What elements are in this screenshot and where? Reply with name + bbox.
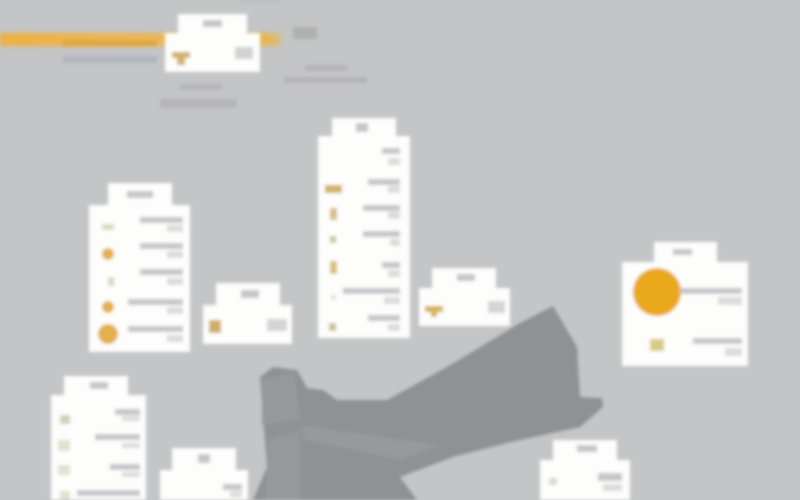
- panel: small card B: [419, 268, 510, 326]
- icon: marker B: [425, 306, 443, 317]
- row 5: [98, 324, 183, 344]
- row 3: [108, 269, 183, 286]
- top orange band: [0, 33, 281, 46]
- row 4: [102, 299, 183, 314]
- row 1: [382, 148, 400, 165]
- panel: pie card: [622, 242, 748, 366]
- panel: top card: [165, 14, 260, 72]
- row 6: [331, 288, 400, 304]
- icon: small marker: [650, 339, 664, 351]
- panel: small card A: [203, 283, 292, 344]
- top band labels: [63, 0, 367, 108]
- row 3: [58, 464, 140, 477]
- panel: left list: [89, 183, 190, 352]
- row 3: [330, 205, 400, 220]
- icon: marker A: [209, 320, 221, 333]
- panel: lower middle card: [160, 448, 248, 500]
- row 4: [60, 490, 140, 500]
- row 2: [58, 434, 140, 451]
- panel: lower right card: [540, 440, 630, 500]
- row 1: [60, 409, 140, 424]
- icon: top card marker: [172, 52, 190, 65]
- row 4: [330, 231, 400, 246]
- row 5: [330, 261, 400, 277]
- row 2: [325, 179, 400, 193]
- row 7: [329, 315, 400, 331]
- row 1: [102, 217, 183, 232]
- chart: orange circle: [633, 268, 681, 316]
- map silhouette: [253, 306, 603, 500]
- panel: tall list: [318, 118, 410, 338]
- panel: lower left list: [51, 376, 146, 500]
- row 2: [102, 243, 183, 260]
